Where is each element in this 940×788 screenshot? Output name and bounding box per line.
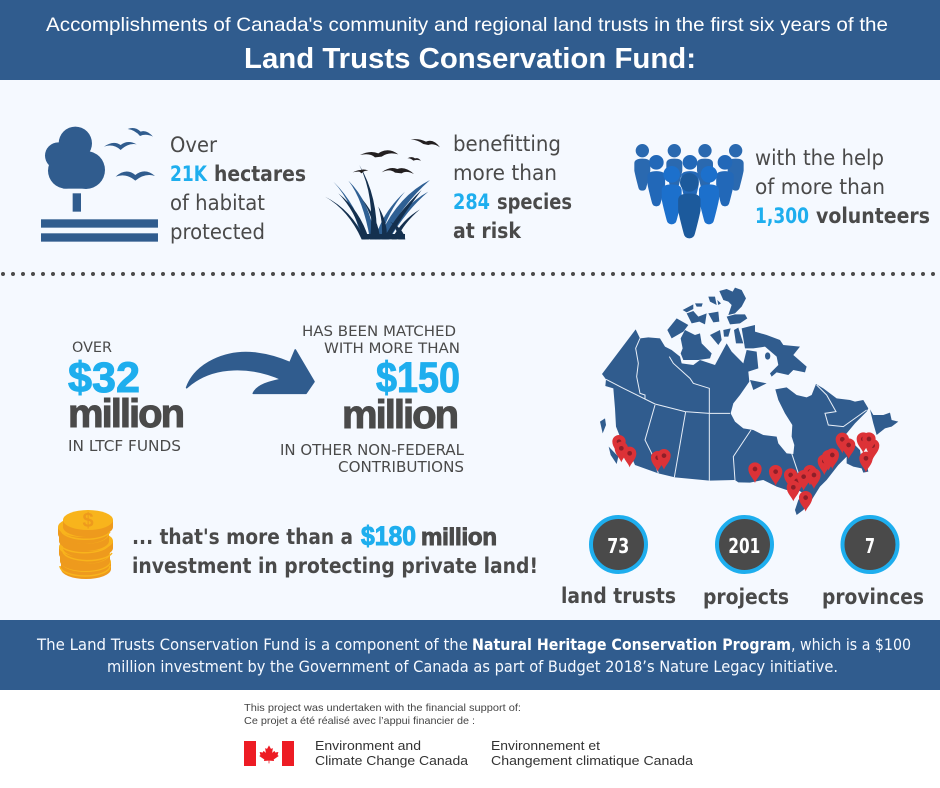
icon: coin stack <box>58 510 113 579</box>
text: LTCF funds: million <box>68 392 185 436</box>
text: volunteers: volunteers <box>816 204 930 228</box>
department name, English: Environment and <box>315 738 421 753</box>
icon: grass and birds <box>325 139 440 239</box>
icon: group of people <box>634 144 744 238</box>
footer text: The Land Trusts Conservation Fund is a component of the <box>36 635 468 654</box>
text: LTCF funds: IN LTCF FUNDS <box>68 437 181 455</box>
text: investment summary: ... that's more than a <box>132 525 353 549</box>
text: species: more than <box>453 161 557 185</box>
text: investment summary: million <box>421 524 497 551</box>
text: investment summary: $180 <box>361 521 416 551</box>
text: hectares: Over <box>170 133 217 157</box>
panel: total investment <box>58 510 538 579</box>
panel: hectares stat <box>41 127 306 244</box>
stat: projects <box>703 517 789 609</box>
header subtitle: Accomplishments of Canada's community and regional land trusts in the first six years of the <box>46 14 888 36</box>
text: LTCF funds: OVER <box>72 340 112 356</box>
text: matched funds <box>280 324 465 476</box>
funder acknowledgement <box>0 690 940 788</box>
stat: provinces <box>822 517 924 609</box>
stat: projects: 201 <box>728 534 760 558</box>
text: volunteers: with the help <box>755 146 884 170</box>
icon: tree, birds and land <box>41 127 158 242</box>
text: investment summary: investment in protecting private land! <box>132 554 538 578</box>
stat: provinces: 7 <box>865 534 875 558</box>
text: matched funds: HAS BEEN MATCHED <box>302 324 456 340</box>
stat: provinces: provinces <box>822 585 924 609</box>
department name, French <box>491 738 694 768</box>
department name, French: Changement climatique Canada <box>491 753 694 768</box>
header banner <box>0 0 940 80</box>
footer text <box>36 635 911 676</box>
department name, English <box>315 738 469 768</box>
text: volunteers: 1,300 <box>755 204 809 228</box>
text: matched funds: $150 <box>376 354 460 402</box>
text: LTCF funds <box>68 340 185 455</box>
footer text: Natural Heritage Conservation Program <box>472 635 791 654</box>
map of Canada with project pins <box>600 288 898 515</box>
text: volunteers: of more than <box>755 175 885 199</box>
footer band <box>0 620 940 690</box>
stat: land trusts: land trusts <box>561 584 676 608</box>
provincial borders <box>606 338 867 481</box>
location pins <box>612 432 879 512</box>
text: species: at risk <box>453 219 522 243</box>
text: hectares: of habitat <box>170 191 265 215</box>
text: LTCF funds: $32 <box>68 354 140 402</box>
footer text: , which is a $100 <box>791 635 911 654</box>
text: matched funds: million <box>342 393 459 437</box>
text: investment summary <box>132 521 538 578</box>
text: species: benefitting <box>453 132 561 156</box>
panel: funding match <box>68 324 465 476</box>
acknowledgement text: This project was undertaken with the financial support of: <box>244 702 521 714</box>
panel: volunteers stat <box>634 144 930 238</box>
text: matched funds: WITH MORE THAN <box>324 341 460 357</box>
acknowledgement text: Ce projet a été réalisé avec l’appui financier de : <box>244 715 475 727</box>
text: hectares: protected <box>170 220 265 244</box>
acknowledgement text <box>244 702 521 727</box>
stat: land trusts: 73 <box>607 534 629 558</box>
stat: projects: projects <box>703 585 789 609</box>
text: species <box>453 132 572 243</box>
text: hectares: 21K <box>170 162 208 186</box>
text: hectares: hectares <box>214 162 306 186</box>
map landmass <box>600 288 898 515</box>
text: matched funds: CONTRIBUTIONS <box>338 458 464 476</box>
arrow <box>187 350 314 393</box>
arctic islands <box>667 288 807 390</box>
icon: Canadian flag <box>244 741 294 766</box>
department name, French: Environnement et <box>491 738 600 753</box>
text: species: species <box>497 190 572 214</box>
icon: coin stack: $ <box>82 510 94 532</box>
stat: land trusts <box>561 517 676 608</box>
text: matched funds: IN OTHER NON-FEDERAL <box>280 441 465 459</box>
department name, English: Climate Change Canada <box>315 753 469 768</box>
text: species: 284 <box>453 190 490 214</box>
text: hectares <box>170 133 306 244</box>
footer text: million investment by the Government of Canada as part of Budget 2018’s Nature Legacy initiative. <box>107 657 838 676</box>
text: volunteers <box>755 146 930 228</box>
panel: species stat <box>325 132 572 243</box>
main title: Land Trusts Conservation Fund: <box>244 43 696 75</box>
